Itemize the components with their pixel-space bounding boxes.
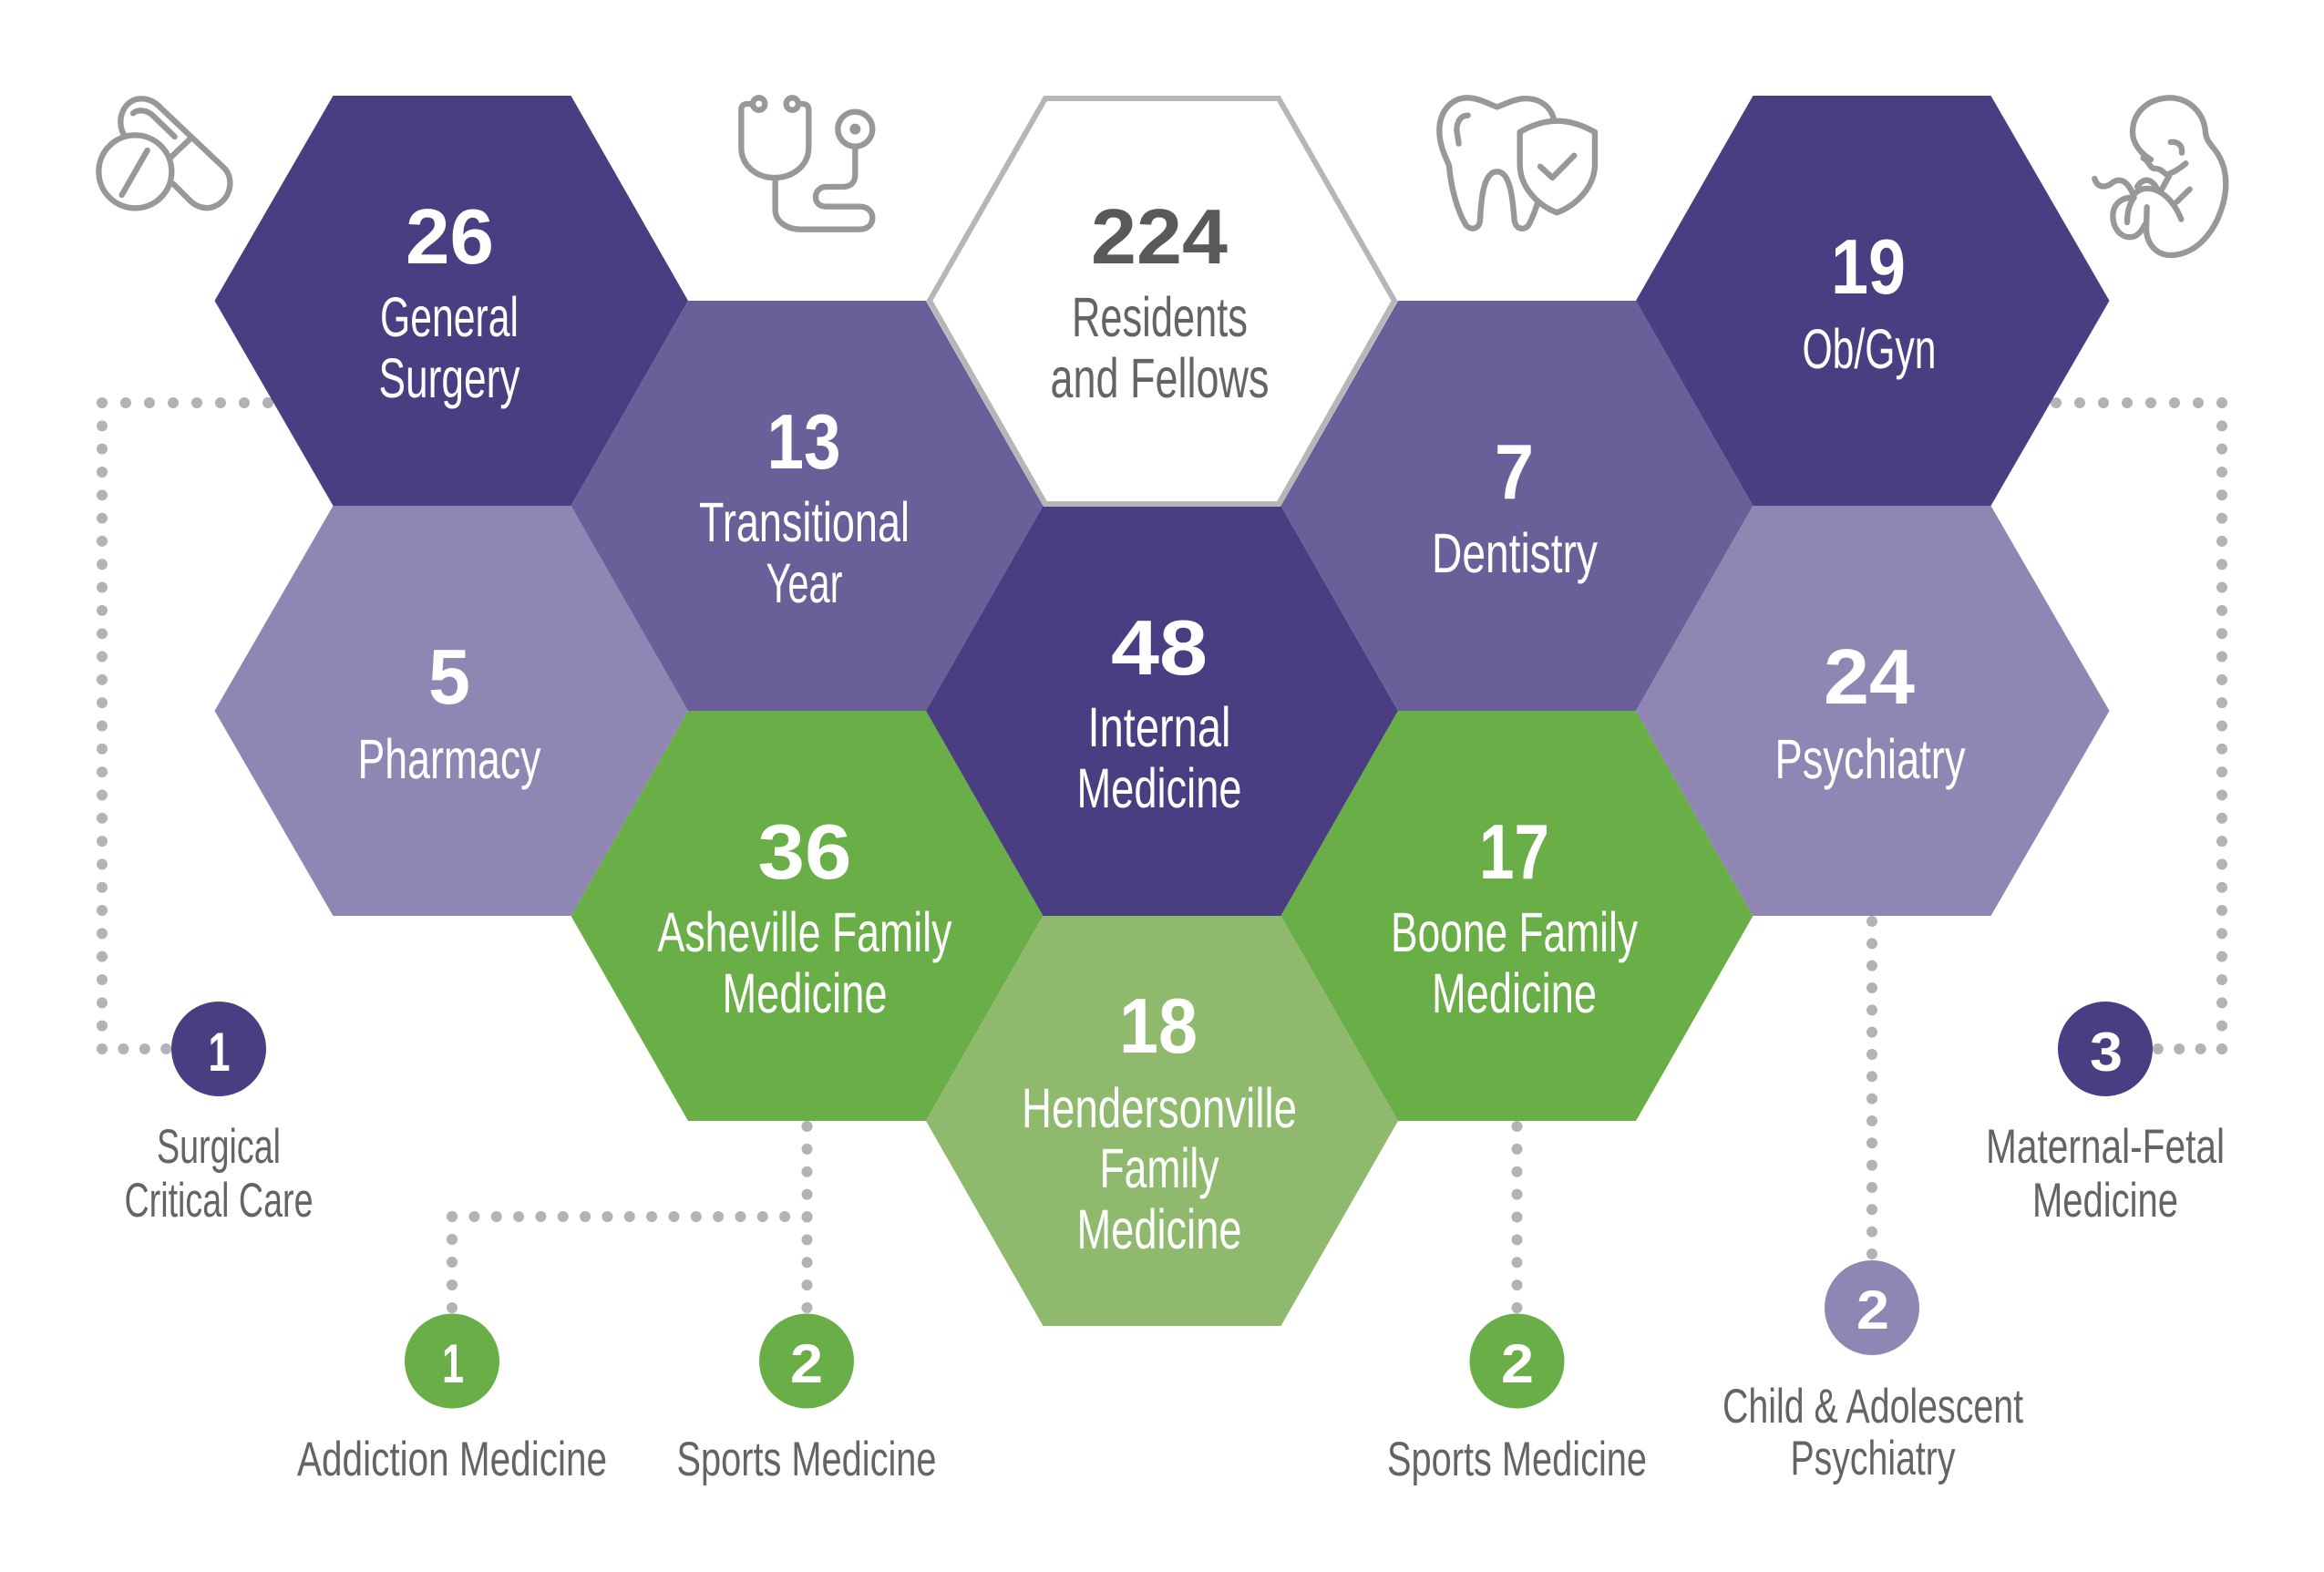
label: Dentistry: Dentistry	[1432, 522, 1598, 584]
callout: Surgical Critical Care	[124, 1002, 314, 1228]
callout: Child and Adolescent Psychiatry: 2	[1856, 1279, 1889, 1341]
count: 18: 18	[1119, 983, 1198, 1070]
label: Asheville Family Medicine: Asheville Family	[658, 901, 952, 963]
icon: pills	[98, 98, 230, 208]
label: Hendersonville Family Medicine: Hendersonville	[1022, 1077, 1297, 1139]
callout: Surgical Critical Care: Surgical	[157, 1120, 281, 1174]
count: 26: 26	[406, 194, 494, 281]
label: Transitional Year: Transitional	[699, 491, 910, 553]
label: Pharmacy: Pharmacy	[357, 728, 541, 790]
hexagon: Dentistry	[1281, 301, 1753, 711]
label: Psychiatry: Psychiatry	[1775, 728, 1966, 790]
count: 13: 13	[767, 399, 840, 486]
connector: Asheville Family Medicine to fellowships	[451, 1126, 807, 1309]
count: 24: 24	[1824, 634, 1915, 721]
count: 17: 17	[1479, 809, 1549, 896]
hexagon: Internal Medicine	[926, 506, 1398, 916]
label: General Surgery: Surgery	[379, 347, 520, 409]
callout: Child and Adolescent Psychiatry: Psychiatry	[1790, 1432, 1956, 1485]
hexagon: Pharmacy	[215, 506, 688, 916]
count: 5: 5	[428, 634, 470, 721]
connector: Ob/Gyn to Maternal-Fetal Medicine	[2032, 403, 2222, 1050]
icon: fetus	[2094, 98, 2226, 255]
label: Hendersonville Family Medicine: Medicine	[1077, 1198, 1241, 1260]
connector: General Surgery to Surgical Critical Care	[102, 403, 292, 1050]
callout: Addiction Medicine	[297, 1314, 607, 1486]
hexagon: Asheville Family Medicine	[571, 711, 1043, 1121]
label: Hendersonville Family Medicine: Family	[1099, 1137, 1219, 1199]
callout: Child and Adolescent Psychiatry	[1722, 1260, 2023, 1485]
hexagon: Boone Family Medicine	[1281, 711, 1753, 1121]
callout: Addiction Medicine: 1	[442, 1333, 464, 1394]
callout: Addiction Medicine: Addiction Medicine	[297, 1433, 607, 1486]
label: General Surgery: General	[380, 286, 519, 348]
connector: Psychiatry to Child and Adolescent Psychiatry	[1866, 921, 1877, 1255]
label: Internal Medicine: Medicine	[1077, 757, 1241, 819]
hexagon: General Surgery	[215, 96, 688, 506]
callout: Child and Adolescent Psychiatry: Child & Adolescent	[1722, 1380, 2023, 1433]
count: 7: 7	[1495, 429, 1534, 516]
hexagon: Psychiatry	[1636, 506, 2109, 916]
hexagon: Transitional Year	[571, 301, 1043, 711]
callout: Sports Medicine (Asheville)	[676, 1314, 937, 1486]
callout: Surgical Critical Care: 1	[208, 1022, 230, 1083]
label: Internal Medicine: Internal	[1088, 696, 1230, 758]
hexagon: Ob/Gyn	[1636, 96, 2109, 506]
count: 224: 224	[1091, 194, 1228, 281]
label: Residents and Fellows: Residents	[1072, 286, 1248, 348]
callout: Maternal-Fetal Medicine: Medicine	[2032, 1174, 2178, 1228]
label: Boone Family Medicine: Boone Family	[1391, 901, 1638, 963]
hexagon: Hendersonville Family Medicine	[926, 916, 1398, 1326]
callout: Sports Medicine (Boone)	[1387, 1314, 1647, 1486]
callout: Sports Medicine (Asheville): 2	[790, 1333, 823, 1394]
callout: Sports Medicine (Asheville): Sports Medicine	[676, 1433, 937, 1486]
callout: Maternal-Fetal Medicine: 3	[2090, 1022, 2123, 1083]
callout: Surgical Critical Care: Critical Care	[124, 1174, 314, 1228]
callout: Sports Medicine (Boone): Sports Medicine	[1387, 1433, 1647, 1486]
icon: tooth with shield	[1439, 98, 1595, 229]
label: Residents and Fellows: and Fellows	[1050, 347, 1269, 409]
count: 19: 19	[1831, 224, 1906, 311]
label: Boone Family Medicine: Medicine	[1432, 962, 1597, 1024]
callout: Sports Medicine (Boone): 2	[1501, 1333, 1534, 1394]
callout: Maternal-Fetal Medicine: Maternal-Fetal	[1986, 1120, 2225, 1174]
connector: Boone Family Medicine to Sports Medicine	[1511, 1126, 1522, 1309]
count: 48: 48	[1111, 605, 1208, 692]
label: Transitional Year: Year	[766, 552, 842, 614]
icon: stethoscope	[741, 98, 872, 230]
label: Ob/Gyn: Ob/Gyn	[1803, 318, 1936, 380]
label: Asheville Family Medicine: Medicine	[722, 962, 888, 1024]
count: 36: 36	[758, 809, 851, 896]
callout: Maternal-Fetal Medicine	[1986, 1002, 2225, 1228]
hexagon: Residents and Fellows total	[930, 98, 1394, 504]
